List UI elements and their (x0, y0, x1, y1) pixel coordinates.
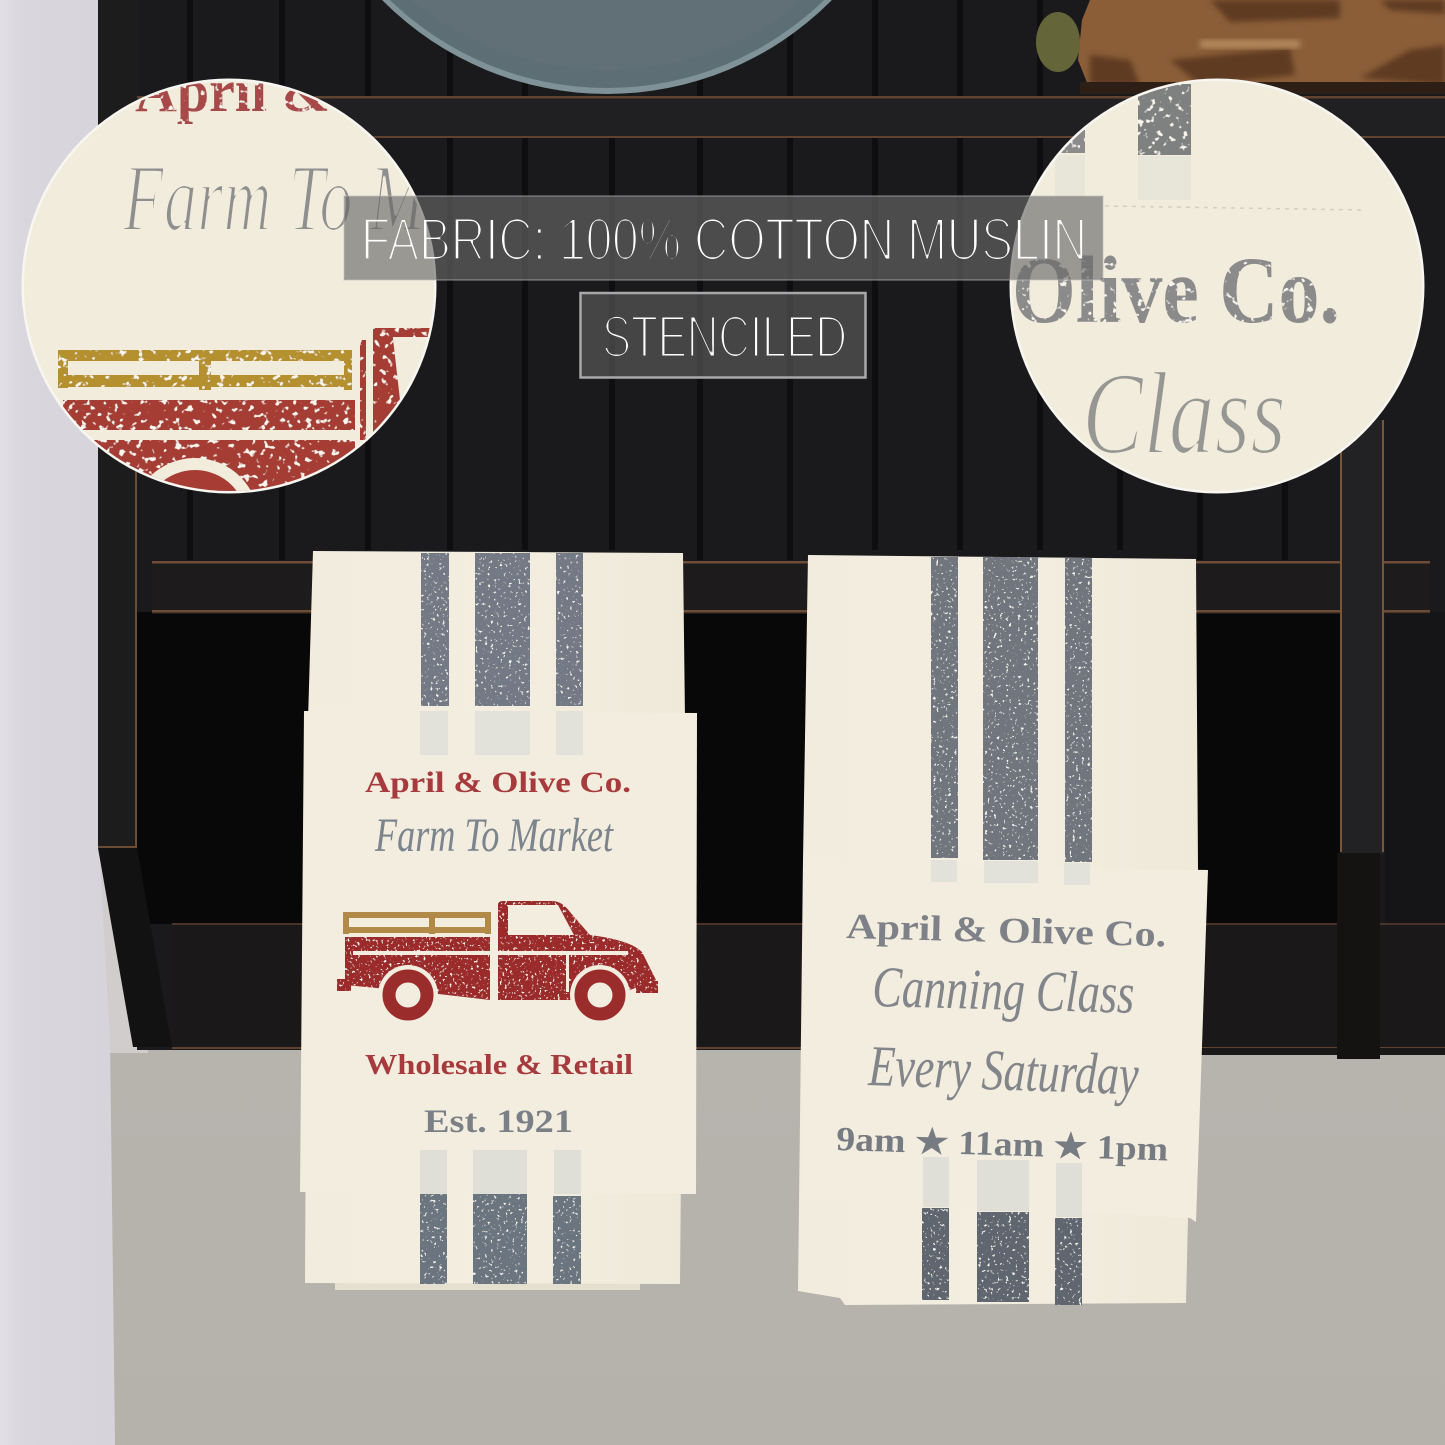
zoomed heading: Olive Co. (1012, 237, 1340, 343)
towel times line: 9am ★ 11am ★ 1pm (836, 1121, 1169, 1168)
zoomed stitching (1105, 206, 1365, 210)
top stripes (421, 553, 583, 706)
top rail (137, 96, 1445, 138)
towel front pocket (300, 711, 697, 1194)
plate on shelf (291, 0, 923, 94)
towel heading: April & Olive Co. (365, 766, 631, 799)
detail circle: left fabric close-up (22, 78, 436, 494)
banner: fabric (344, 196, 1103, 280)
top stripes (931, 557, 1092, 862)
zoomed truck body (63, 328, 433, 500)
towel script line: Farm To Market (374, 809, 614, 862)
zoomed script: Farm To M (122, 145, 428, 251)
zoomed red heading: April & (135, 58, 330, 124)
right upright (1340, 420, 1384, 854)
zoomed truck rails (58, 350, 352, 390)
shadowed lower panel (137, 612, 1342, 924)
detail circle: right fabric close-up (1010, 78, 1424, 494)
towel back panel (305, 551, 685, 1284)
bottom stripes (420, 1194, 581, 1284)
truck rails (346, 912, 488, 934)
left upright (98, 0, 137, 848)
zoomed wheel (164, 470, 237, 491)
towel line: established: Est. 1921 (424, 1104, 573, 1140)
zoomed stripes (1055, 84, 1191, 200)
truck body (337, 901, 658, 1000)
truck wheels (389, 976, 619, 1014)
left diagonal foot (98, 848, 172, 1047)
wooden log and moss (1036, 0, 1445, 94)
towel under layer (335, 1280, 640, 1290)
right upright foot (1337, 853, 1380, 1059)
right towel: canning class design (798, 555, 1208, 1305)
zoomed wheel arch (151, 458, 250, 491)
truck window and trim (353, 905, 628, 992)
icon: red pickup truck (337, 901, 658, 1025)
truck wheel arches (378, 965, 438, 1025)
bottom stripes (922, 1208, 1082, 1305)
banner: stenciled: STENCILED (602, 304, 847, 370)
zoomed script: Class (1082, 348, 1286, 479)
plank grooves (190, 0, 1285, 560)
middle rail (152, 561, 1430, 614)
towel front pocket (802, 863, 1208, 1222)
black wooden shelf (98, 0, 1445, 1059)
towel back panel (798, 555, 1198, 1305)
left towel: truck design (300, 551, 697, 1290)
towel line: wholesale: Wholesale & Retail (365, 1050, 633, 1081)
banner: stenciled (580, 293, 866, 378)
towel script line: Every Saturday (867, 1033, 1140, 1107)
bottom rail (172, 923, 1445, 1055)
towel heading: April & Olive Co. (846, 906, 1167, 954)
right-hand lower panel (1385, 612, 1445, 924)
banner: fabric: FABRIC: 100% COTTON MUSLIN (361, 206, 1087, 273)
towel script line: Canning Class (872, 954, 1135, 1026)
